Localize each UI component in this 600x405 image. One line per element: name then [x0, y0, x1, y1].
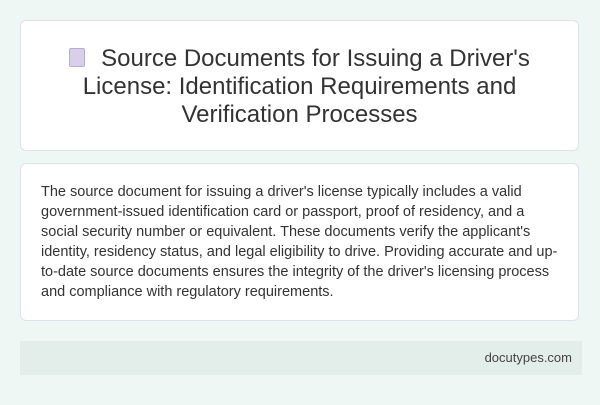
panel: description card	[20, 163, 579, 321]
text block: description: The source document for issuing a driver's license typically includes a valid government-issued identification card or passport, proof of residency, and a social security number or equivalent. These documents verify the applicant's identity, residency status, and legal eligibility to drive. Providing accurate and up-to-date source documents ensures the integrity of the driver's licensing process and compliance with regulatory requirements.	[41, 184, 557, 300]
title: Source Documents for Issuing a Driver's License: Identification Requirements and Verification Processes	[83, 45, 530, 128]
footer text: docutypes.com	[485, 350, 572, 365]
footer	[20, 341, 582, 375]
icon: scroll document	[69, 48, 85, 67]
panel: title card	[20, 20, 579, 151]
